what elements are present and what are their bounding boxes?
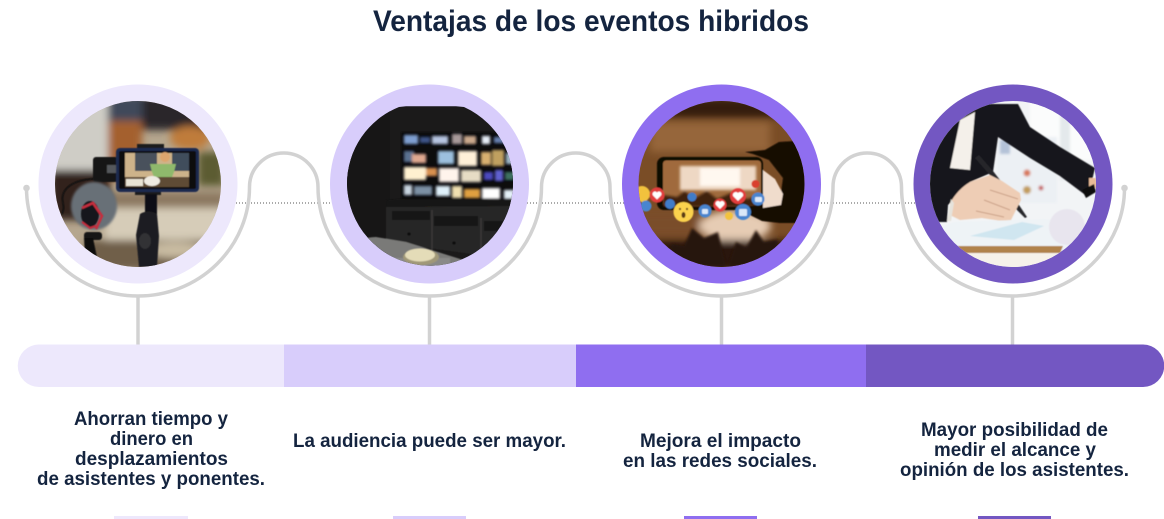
circle 4: person signing document photo xyxy=(914,84,1112,284)
circle 2: television photo xyxy=(330,84,529,284)
hand xyxy=(742,141,806,223)
shirt xyxy=(950,112,975,170)
segment 3 xyxy=(576,344,866,387)
text: alcance xyxy=(900,420,1129,481)
text: ahorran: de asistentes y ponentes. xyxy=(37,469,265,490)
pen xyxy=(975,155,1027,218)
table and bowl xyxy=(368,236,462,264)
text: impacto: Mejora el impacto xyxy=(640,431,801,452)
suit xyxy=(928,104,1095,222)
timeline curve xyxy=(23,153,1128,345)
title: Ventajas de los eventos hibridos xyxy=(373,5,809,38)
dotted connector line xyxy=(236,202,930,204)
timeline bar xyxy=(18,344,1164,387)
text: audiencia: La audiencia puede ser mayor. xyxy=(293,431,566,452)
circle 1: camera gimbal photo xyxy=(38,84,238,284)
text: impacto: en las redes sociales. xyxy=(623,451,817,472)
text: ahorran: desplazamientos xyxy=(75,449,228,470)
text: ahorran: dinero en xyxy=(110,429,193,450)
segment 4 xyxy=(866,344,1164,387)
reactions xyxy=(638,185,651,203)
text: alcance: medir el alcance y xyxy=(934,440,1096,461)
hand xyxy=(950,175,1021,221)
phone xyxy=(657,157,763,210)
bottom accent bars xyxy=(114,516,1051,519)
text: alcance: Mayor posibilidad de xyxy=(921,420,1108,441)
circle 3: concert phone with reactions photo xyxy=(622,84,821,284)
text: impacto xyxy=(623,431,817,472)
text: ahorran xyxy=(37,409,265,490)
text: ahorran: Ahorran tiempo y xyxy=(74,409,228,430)
cable xyxy=(61,178,93,214)
tv screen xyxy=(401,132,515,200)
segment 1 xyxy=(18,344,284,387)
mic base xyxy=(84,232,102,240)
document xyxy=(942,219,1092,251)
text: alcance: opinión de los asistentes. xyxy=(900,460,1129,481)
cabinet xyxy=(386,206,510,254)
segment 2 xyxy=(284,344,576,387)
